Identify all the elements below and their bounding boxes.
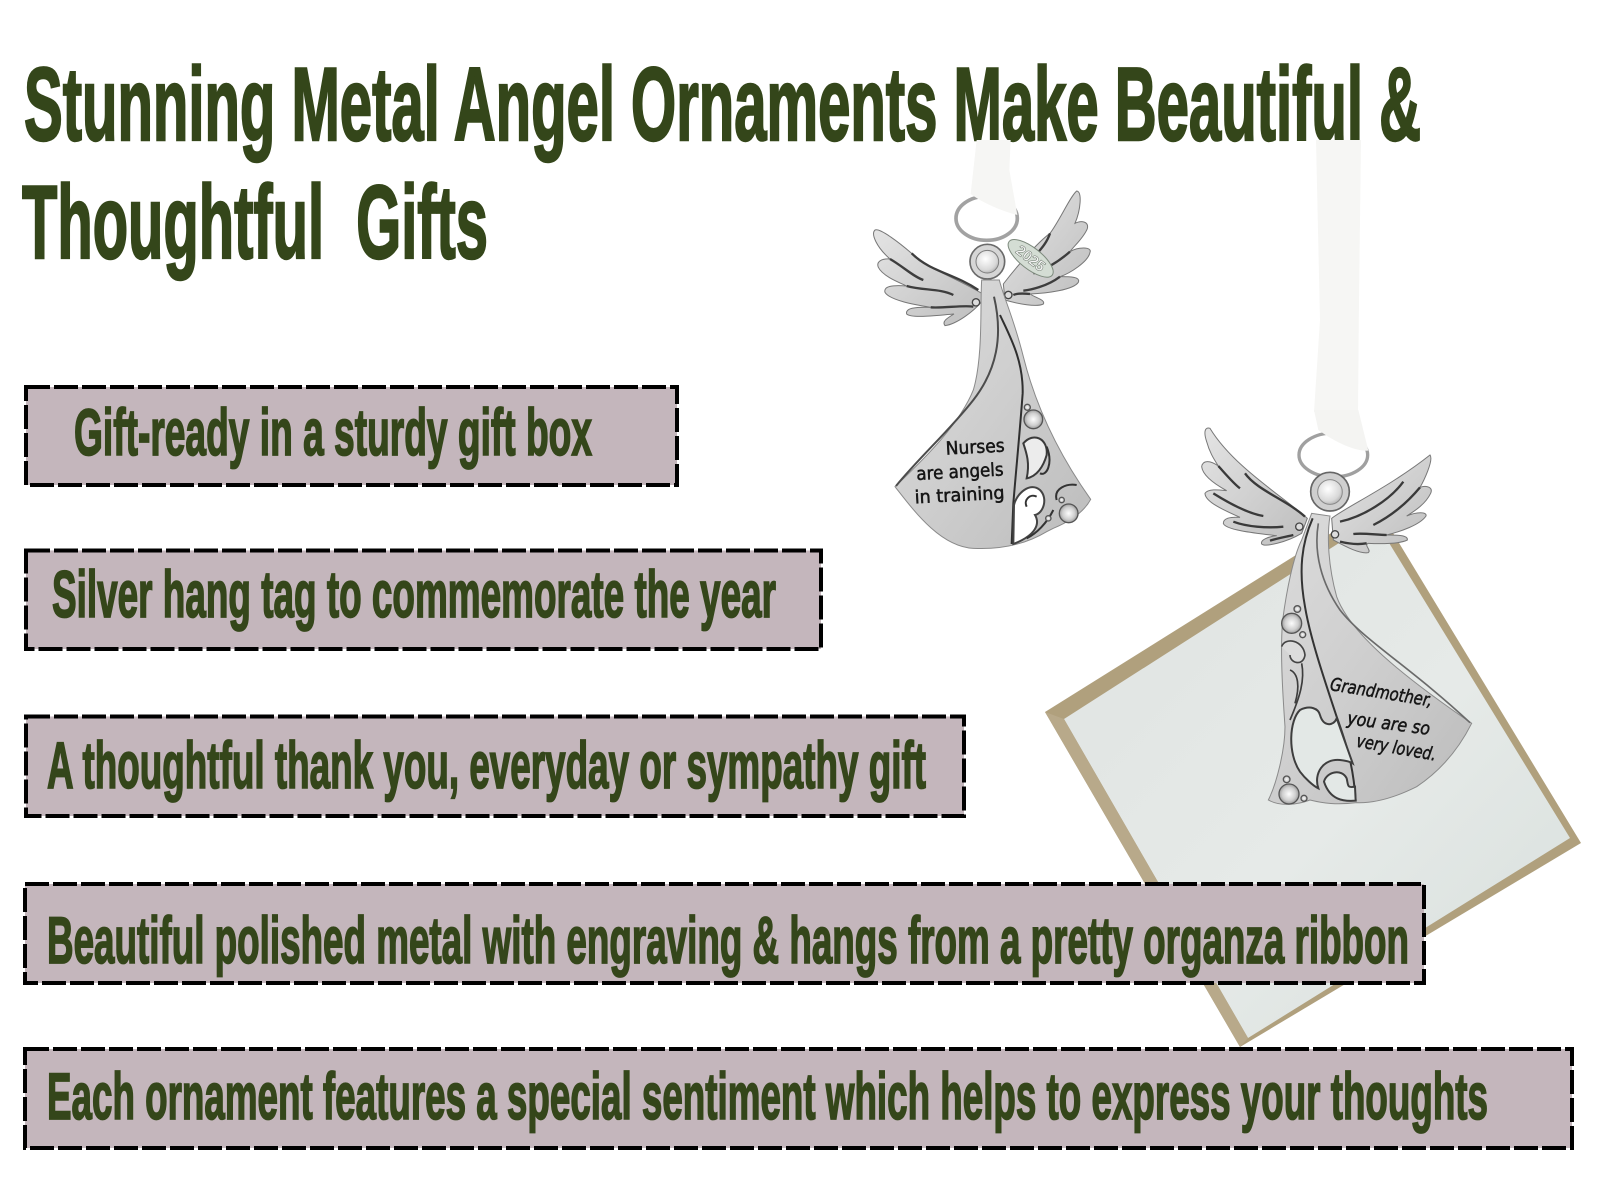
engraved sentiment [914,436,1005,508]
feature banner: thank you gift: A thoughtful thank you, everyday or sympathy gift [47,728,926,802]
engraved sentiment: very loved. [1355,731,1438,766]
engraved sentiment: are angels [916,459,1004,485]
gems [1024,404,1078,523]
engraved sentiment: you are so [1345,708,1431,740]
year hang tag [1003,233,1059,284]
feature banner: polished metal [25,884,1424,983]
feature banner: thank you gift [26,716,964,816]
feature banner: gift box [26,387,677,485]
engraved sentiment: Nurses [945,436,1005,460]
engraved sentiment [1329,674,1438,766]
halo ring [956,196,1017,240]
right wing [1003,191,1090,305]
gown [1268,513,1472,804]
left wing [874,230,982,326]
ribbon of second angel [1314,140,1361,412]
head [970,244,1005,279]
feature banner: hang tag [26,550,821,649]
title: Thoughtful Gifts [22,165,488,281]
gift box [1045,505,1581,1047]
angel ornament: nurses with 2025 tag [874,140,1091,549]
feature banner: gift box: Gift-ready in a sturdy gift box [74,395,592,469]
engraved sentiment: in training [914,483,1005,508]
left wing [1202,428,1307,545]
head [1311,472,1349,511]
ribbon [971,140,1017,215]
right wing [1331,455,1431,553]
gown [895,280,1091,549]
engraved sentiment: Grandmother, [1329,674,1434,711]
gems [1279,606,1307,804]
feature banner: hang tag: Silver hang tag to commemorate the year [52,557,776,631]
angel ornament: grandmother [1202,410,1472,804]
halo ring [1299,433,1368,477]
year hang tag: 2025 [1012,243,1048,275]
title [22,47,1421,281]
ribbon knot [1314,410,1368,451]
